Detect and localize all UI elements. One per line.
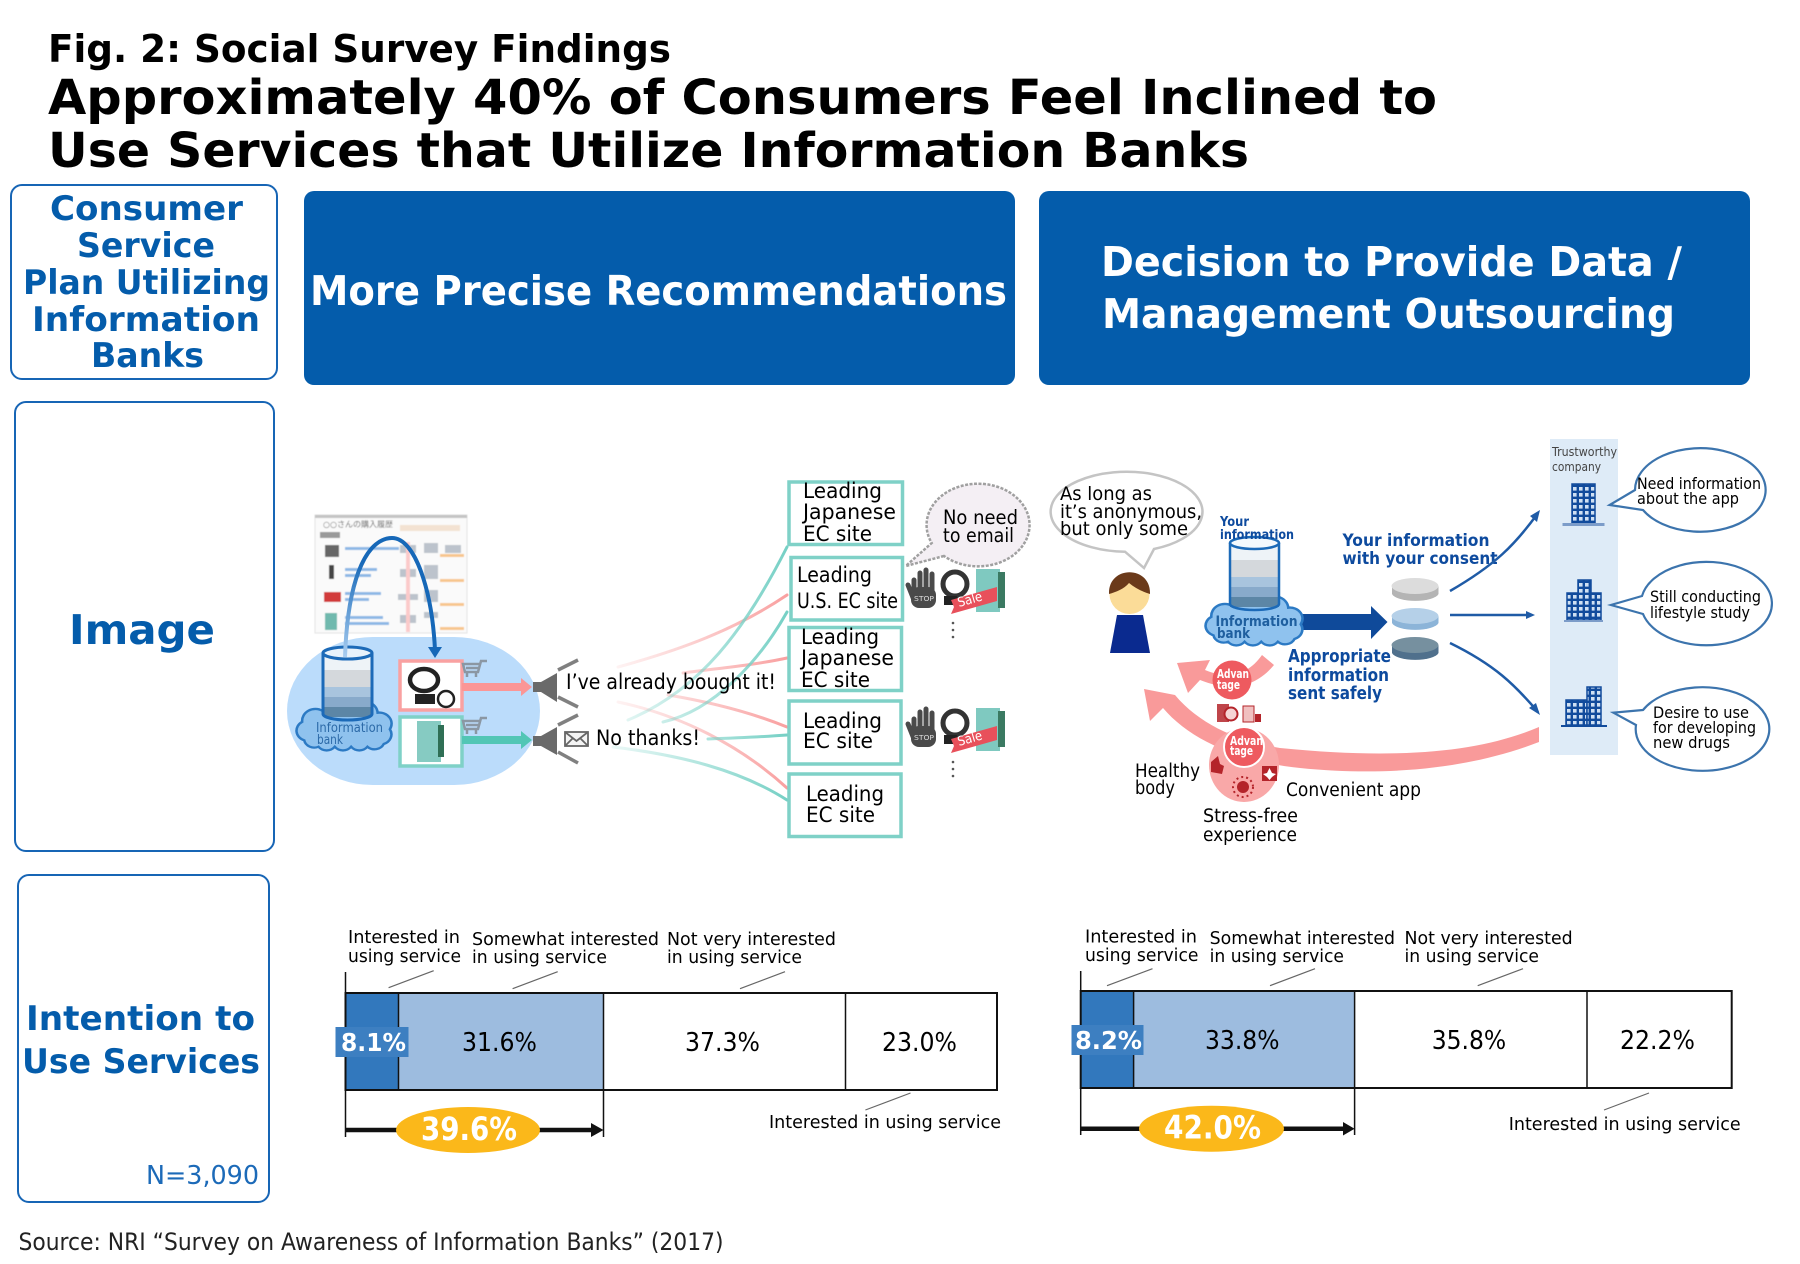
row header: consumer service plan: Plan Utilizing (23, 263, 270, 303)
row header: consumer service plan: Information (32, 300, 260, 340)
cloud label: bank (317, 732, 343, 748)
speech bubble: still conducting (1611, 562, 1772, 645)
icon: speaker top (533, 660, 578, 707)
category labels (348, 927, 836, 968)
row header: image (15, 402, 274, 851)
speech bubble: no need to email (906, 484, 1030, 566)
message: no thanks: No thanks! (596, 726, 700, 750)
speech bubble: desire to use: Desire to use (1653, 703, 1749, 722)
trustworthy company column: Trustworthy (1551, 444, 1618, 459)
icon: carts (463, 661, 487, 734)
purchase history document: ○○さんの購入履歴 (323, 519, 393, 529)
icons: stop hand, headphones, sale (upper) (908, 569, 1005, 638)
EC site box 3 (789, 625, 902, 692)
category labels: using service (348, 946, 461, 967)
category labels (1085, 927, 1573, 967)
category labels: using service (1085, 945, 1198, 966)
cloud label (316, 720, 383, 748)
icons: small benefit glyphs (1211, 704, 1277, 797)
connecting lines: pink and teal (613, 547, 787, 800)
stacked bar: 22.2% (1620, 1026, 1695, 1056)
EC site box 5 (789, 774, 901, 836)
arrow: data arc into recommendation (345, 538, 442, 658)
category labels: Interested in (1085, 927, 1197, 948)
column header: more precise recommendations: More Precise Recommendations (310, 267, 1007, 315)
figure label: Fig. 2: Social Survey Findings (48, 27, 671, 71)
arrow: teal to message (462, 731, 532, 749)
EC site box 4 (789, 701, 901, 764)
EC site box 1: EC site (803, 522, 872, 546)
icon: building middle (1564, 580, 1603, 622)
label: your information with your consent: Your information (1342, 531, 1490, 551)
icon: gray disc (1392, 578, 1438, 601)
icon: building bottom (1561, 687, 1607, 727)
information bank blob (287, 637, 540, 785)
total bracket arrow: 42.0% (1164, 1108, 1261, 1146)
EC site box 1: Japanese (801, 500, 896, 524)
advantage badge lower (1224, 727, 1264, 767)
EC site box 4: Leading (803, 709, 882, 733)
row header: consumer service plan: Consumer (50, 189, 243, 229)
speech bubble: need information: Need information (1637, 474, 1761, 493)
EC site box 2: Leading (797, 563, 872, 587)
title (48, 70, 1437, 179)
icon: building top (1562, 484, 1604, 526)
row header: consumer service plan: Banks (91, 336, 204, 376)
speech bubble: desire to use (1613, 687, 1769, 771)
cloud label: bank (1217, 626, 1251, 642)
purchase history document (315, 515, 467, 633)
icon: speaker bottom (533, 715, 578, 763)
advantage badge upper: Advan (1217, 667, 1249, 681)
title: Approximately 40% of Consumers Feel Inclined to (48, 70, 1437, 126)
arrow: big pink benefit arrow (1144, 689, 1539, 771)
icon: blue disc (1392, 608, 1438, 630)
chart: intention, recommendations (336, 927, 1001, 1153)
stacked bar: 35.8% (1432, 1026, 1506, 1056)
label: not interested: Interested in using service (1509, 1114, 1741, 1135)
sample size: N=3,090 (146, 1161, 259, 1191)
label: appropriate information sent safely: Appropriate (1288, 647, 1391, 667)
stacked bar (336, 993, 997, 1090)
category labels: in using service (667, 947, 802, 968)
panel: data provision image (1051, 439, 1772, 846)
EC site box 1 (789, 479, 902, 546)
category labels: Somewhat interested (472, 929, 659, 950)
message: already bought: I’ve already bought it! (566, 670, 776, 694)
arrow: pink to message (462, 678, 532, 696)
arrow: small pink benefit arrow (1177, 655, 1274, 693)
icons: stop hand, headphones, sale (upper): STOP (914, 595, 934, 603)
icon: envelope (565, 732, 588, 746)
EC site box 3: EC site (801, 668, 870, 692)
speech bubble: desire to use: new drugs (1653, 733, 1730, 752)
stacked bar: 23.0% (882, 1028, 957, 1058)
category labels: Not very interested (667, 929, 836, 950)
label: not interested: Interested in using service (769, 1112, 1001, 1133)
trustworthy company column (1550, 439, 1618, 755)
total bracket arrow (1081, 971, 1355, 1152)
speech bubble: no need to email: to email (943, 524, 1014, 547)
icon: person (1109, 572, 1150, 653)
label: appropriate information sent safely: sent safely (1288, 684, 1383, 704)
label: your information (1219, 515, 1294, 543)
arrow: navy sending arrow (1297, 606, 1388, 639)
row header: consumer service plan (11, 185, 277, 379)
speech bubble: as long as anonymous: but only some (1060, 518, 1188, 540)
EC site box 2: U.S. EC site (797, 589, 898, 613)
speech bubble: desire to use: for developing (1653, 718, 1756, 737)
label: appropriate information sent safely: information (1288, 666, 1389, 686)
icon: database cylinder (1230, 537, 1279, 610)
label: stress-free experience (1203, 806, 1298, 846)
advantage badge upper: tage (1217, 678, 1240, 692)
label: healthy body: body (1135, 778, 1175, 799)
advantage badge lower: Advan (1230, 734, 1263, 748)
column header: decision to provide data (1039, 191, 1750, 385)
speech bubble: still conducting: Still conducting (1650, 587, 1761, 606)
stacked bar: 8.2% (1075, 1026, 1142, 1055)
category labels: in using service (1404, 946, 1539, 967)
row header: consumer service plan: Service (77, 226, 215, 266)
row header: image: Image (69, 606, 215, 654)
icon: dark disc (1392, 637, 1438, 660)
speech bubble: still conducting: lifestyle study (1650, 603, 1750, 622)
column header: decision to provide data: Decision to Provide Data / (1101, 238, 1682, 286)
source: Source: NRI “Survey on Awareness of Information Banks” (2017) (18, 1228, 724, 1256)
category labels: in using service (1210, 946, 1344, 967)
label: your information with your consent: with your consent (1342, 549, 1498, 569)
advantage badge upper (1212, 660, 1252, 700)
trustworthy company column: company (1552, 459, 1602, 474)
icon: database cylinder (323, 647, 372, 720)
icon: information bank cloud (296, 699, 392, 750)
panel: recommendations image (287, 479, 1030, 836)
label: your information with your consent (1342, 531, 1498, 569)
speech bubble: need information: about the app (1637, 489, 1739, 508)
category labels: Not very interested (1404, 928, 1573, 949)
icons: stop hand, headphones, sale (upper): Sale (956, 590, 984, 611)
label: your information: information (1220, 528, 1294, 543)
EC site box 5: Leading (806, 782, 884, 806)
speech bubble: as long as anonymous: it’s anonymous, (1060, 501, 1202, 523)
label: healthy body (1135, 761, 1200, 799)
icons: stop hand, headphones, sale (lower): STOP (914, 734, 934, 742)
stacked bar: 33.8% (1205, 1026, 1280, 1056)
category labels: in using service (472, 947, 607, 968)
EC site box 5: EC site (806, 803, 875, 827)
cloud label (1216, 614, 1298, 642)
icons: stop hand, headphones, sale (lower) (908, 708, 1005, 777)
total bracket arrow: 39.6% (421, 1110, 517, 1148)
icons: stop hand, headphones, sale (lower): Sale (956, 729, 984, 750)
label: stress-free experience: experience (1203, 825, 1297, 846)
label: convenient app: Convenient app (1286, 780, 1421, 801)
stacked bar: 37.3% (685, 1028, 760, 1058)
label: healthy body: Healthy (1135, 761, 1200, 782)
label: your information: Your (1219, 515, 1250, 530)
speech bubble: as long as anonymous (1051, 472, 1202, 568)
label: appropriate information sent safely (1288, 647, 1391, 704)
row header: intention to use services: Intention to (26, 999, 255, 1039)
speech bubble: need information (1610, 448, 1766, 532)
category labels: Interested in (348, 927, 460, 948)
row header: intention to use services (18, 875, 269, 1202)
row header: intention to use services: Use Services (22, 1042, 260, 1082)
product: headphones recommended (400, 661, 462, 710)
stacked bar: 31.6% (462, 1028, 537, 1058)
label: stress-free experience: Stress-free (1203, 806, 1298, 827)
EC site box 3: Leading (801, 625, 879, 649)
category labels: Somewhat interested (1210, 928, 1395, 949)
total bracket arrow (346, 972, 604, 1153)
icon: information bank cloud (1206, 594, 1303, 645)
stacked bar: 8.1% (341, 1028, 406, 1057)
column header: decision to provide data: Management Outsourcing (1102, 290, 1675, 338)
benefit circle (1209, 728, 1279, 802)
arrows: data flow to companies (1450, 510, 1540, 715)
speech bubble: no need to email: No need (943, 506, 1018, 529)
cloud label: Information (1216, 614, 1298, 630)
EC site box 2 (791, 558, 902, 620)
speech bubble: as long as anonymous: As long as (1060, 483, 1152, 505)
advantage badge lower: tage (1230, 744, 1253, 758)
column header: more precise recommendations (304, 191, 1015, 385)
chart: intention, data provision (1072, 927, 1741, 1152)
title: Use Services that Utilize Information Banks (48, 123, 1249, 179)
EC site box 4: EC site (803, 729, 873, 753)
product: teal item recommended (400, 717, 462, 766)
EC site box 1: Leading (803, 479, 882, 503)
EC site box 3: Japanese (799, 646, 894, 670)
stacked bar (1072, 991, 1732, 1088)
cloud label: Information (316, 720, 383, 736)
